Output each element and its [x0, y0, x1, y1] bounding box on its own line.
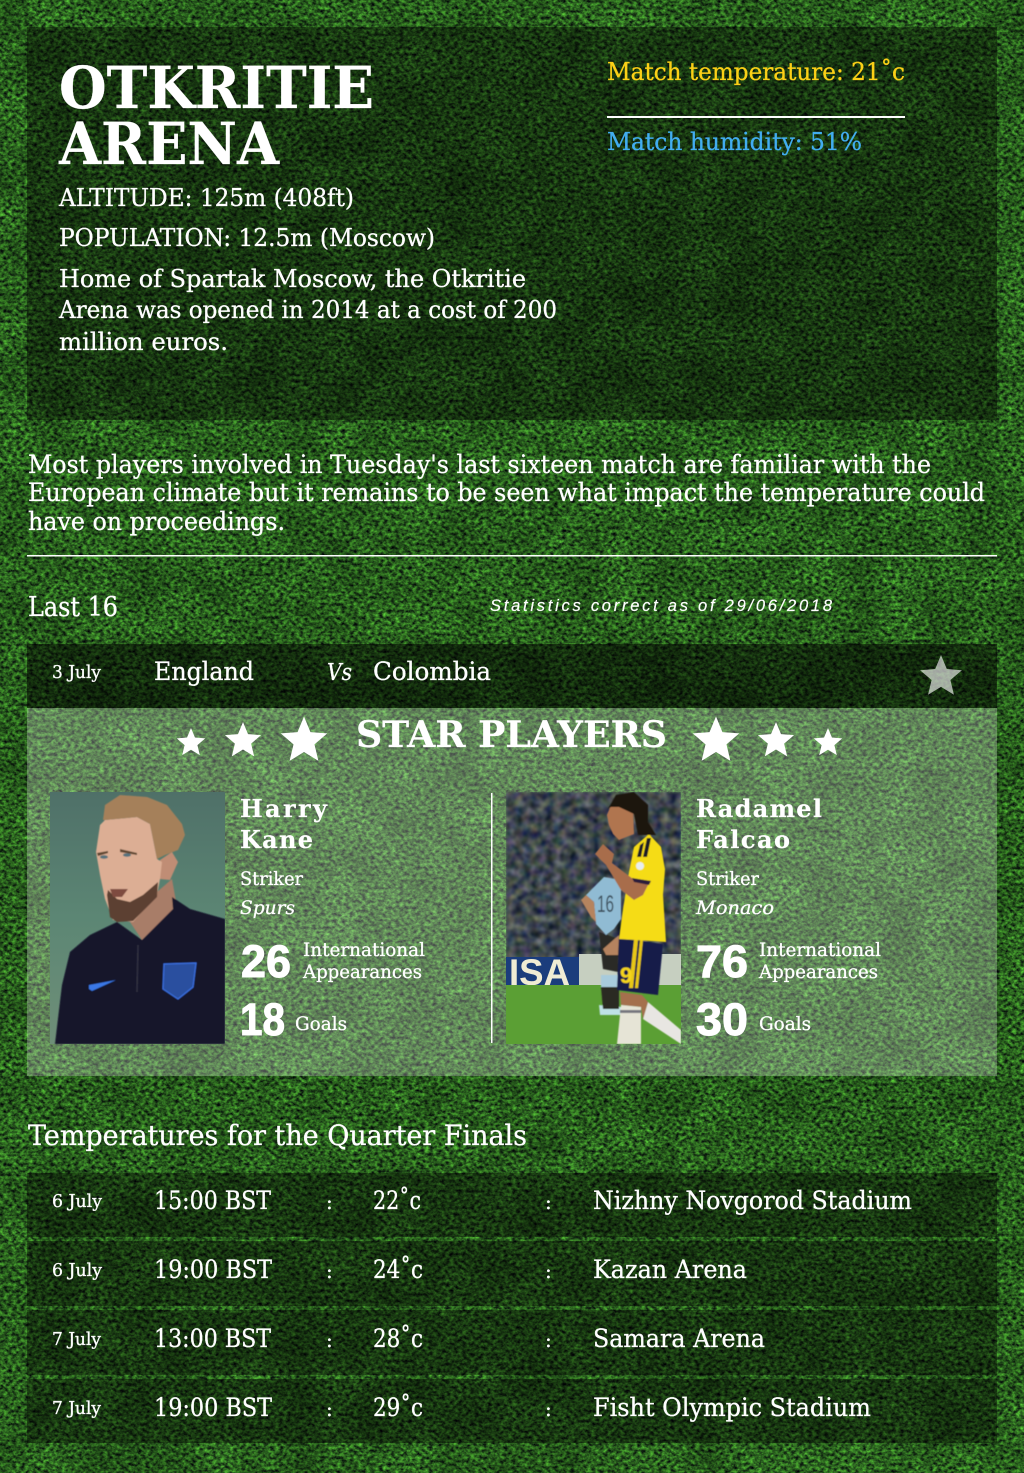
Harry Kane name: Harry: [240, 794, 328, 823]
stadium facts: ALTITUDE: 125m (408ft): [58, 184, 354, 212]
fixture row: England vs Colombia: England: [154, 657, 254, 686]
row: Nizhny Novgorod: Nizhny Novgorod Stadium: [593, 1186, 912, 1215]
Radamel Falcao goals: 30: [696, 994, 748, 1045]
Harry Kane appearances: Appearances: [302, 961, 422, 983]
match temperature: Match temperature: 21˚c: [607, 58, 905, 86]
row: Nizhny Novgorod: :: [545, 1190, 552, 1214]
stadium description: million euros.: [59, 328, 228, 356]
row: Samara: [27, 1310, 997, 1375]
photo: Radamel Falcao: [506, 792, 681, 1044]
row: Samara: :: [326, 1328, 333, 1352]
fixture row: England vs Colombia: Colombia: [373, 657, 491, 686]
title: OTKRITIE: [59, 54, 374, 122]
row: Kazan: 24˚c: [373, 1255, 423, 1284]
Harry Kane role and club: Striker: [240, 868, 304, 890]
row: Nizhny Novgorod: 6 July: [52, 1191, 103, 1212]
intro paragraph: [28, 450, 985, 536]
row: Samara: 13:00 BST: [154, 1324, 271, 1353]
row: Nizhny Novgorod: :: [326, 1190, 333, 1214]
row: Kazan: Kazan Arena: [593, 1255, 747, 1284]
row: Fisht Olympic: 7 July: [52, 1398, 102, 1419]
row: Samara: 28˚c: [373, 1324, 423, 1353]
Radamel Falcao goals: Goals: [759, 1013, 811, 1035]
row: Fisht Olympic: 29˚c: [373, 1393, 423, 1422]
Radamel Falcao appearances: Appearances: [758, 961, 878, 983]
heading: quarter final temperatures: Temperatures for the Quarter Finals: [28, 1119, 527, 1152]
row: Nizhny Novgorod: 15:00 BST: [154, 1186, 271, 1215]
photo: Radamel Falcao: ISA: [509, 952, 570, 993]
row: Nizhny Novgorod: 22˚c: [373, 1186, 421, 1215]
panel: stadium header: [27, 27, 997, 420]
title: [58, 54, 374, 178]
fixture row: England vs Colombia: 3 July: [52, 662, 102, 683]
row: Fisht Olympic: :: [326, 1397, 333, 1421]
stadium facts: POPULATION: 12.5m (Moscow): [59, 224, 435, 252]
stadium facts: [58, 184, 435, 252]
icon: left stars: [177, 716, 327, 761]
Radamel Falcao appearances: International: [759, 939, 881, 961]
Radamel Falcao appearances: [696, 936, 881, 987]
row: Samara: 7 July: [52, 1329, 102, 1350]
table: quarter final temperatures: [27, 1173, 997, 1443]
Harry Kane role and club: Spurs: [240, 897, 295, 919]
stadium description: Arena was opened in 2014 at a cost of 200: [58, 296, 557, 324]
intro paragraph: have on proceedings.: [28, 507, 285, 536]
fixture row: England vs Colombia: Vs: [327, 660, 352, 686]
photo: Radamel Falcao: 9: [620, 963, 632, 988]
row: Kazan: 6 July: [52, 1260, 103, 1281]
row: Samara: Samara Arena: [593, 1324, 765, 1353]
stadium description: [58, 265, 557, 356]
heading: star players: STAR PLAYERS: [356, 714, 667, 756]
row: Fisht Olympic: 19:00 BST: [154, 1393, 272, 1422]
Harry Kane goals: [240, 994, 347, 1045]
photo: Radamel Falcao: 16: [597, 891, 614, 918]
title: ARENA: [58, 110, 280, 178]
row: Kazan: :: [326, 1259, 333, 1283]
heading: last 16: Last 16: [28, 592, 118, 623]
stadium description: Home of Spartak Moscow, the Otkritie: [59, 265, 526, 293]
photo: Harry Kane: [50, 792, 225, 1044]
icon: right stars: [693, 716, 842, 761]
row: Fisht Olympic: [27, 1379, 997, 1443]
Radamel Falcao role and club: Striker: [696, 868, 760, 890]
Radamel Falcao name: Falcao: [696, 825, 790, 854]
Harry Kane name: Kane: [240, 825, 313, 854]
row: Fisht Olympic: Fisht Olympic Stadium: [593, 1393, 871, 1422]
Harry Kane name: [240, 794, 328, 854]
Harry Kane appearances: 26: [241, 936, 291, 987]
Radamel Falcao name: Radamel: [696, 794, 822, 823]
row: Fisht Olympic: :: [545, 1397, 552, 1421]
Harry Kane goals: 18: [240, 994, 285, 1045]
row: Kazan: 19:00 BST: [154, 1255, 272, 1284]
Radamel Falcao appearances: 76: [696, 936, 748, 987]
Harry Kane role and club: [240, 868, 304, 919]
intro paragraph: European climate but it remains to be seen what impact the temperature could: [28, 478, 985, 507]
Harry Kane appearances: International: [303, 939, 425, 961]
row: Samara: :: [545, 1328, 552, 1352]
intro paragraph: Most players involved in Tuesday's last sixteen match are familiar with the: [28, 450, 931, 479]
statistics date note: Statistics correct as of 29/06/2018: [490, 597, 833, 615]
icon: highlighted star: [920, 655, 962, 695]
Radamel Falcao role and club: Monaco: [695, 897, 774, 919]
Harry Kane goals: Goals: [295, 1013, 347, 1035]
match humidity: Match humidity: 51%: [607, 128, 862, 156]
row: Nizhny Novgorod: [27, 1173, 997, 1237]
Radamel Falcao role and club: [695, 868, 774, 919]
panel: star players: [27, 708, 997, 1076]
row: Kazan: :: [545, 1259, 552, 1283]
Radamel Falcao goals: [696, 994, 811, 1045]
Radamel Falcao name: [696, 794, 822, 854]
Harry Kane appearances: [241, 936, 425, 987]
fixture row: England vs Colombia: [27, 644, 997, 708]
row: Kazan: [27, 1241, 997, 1306]
